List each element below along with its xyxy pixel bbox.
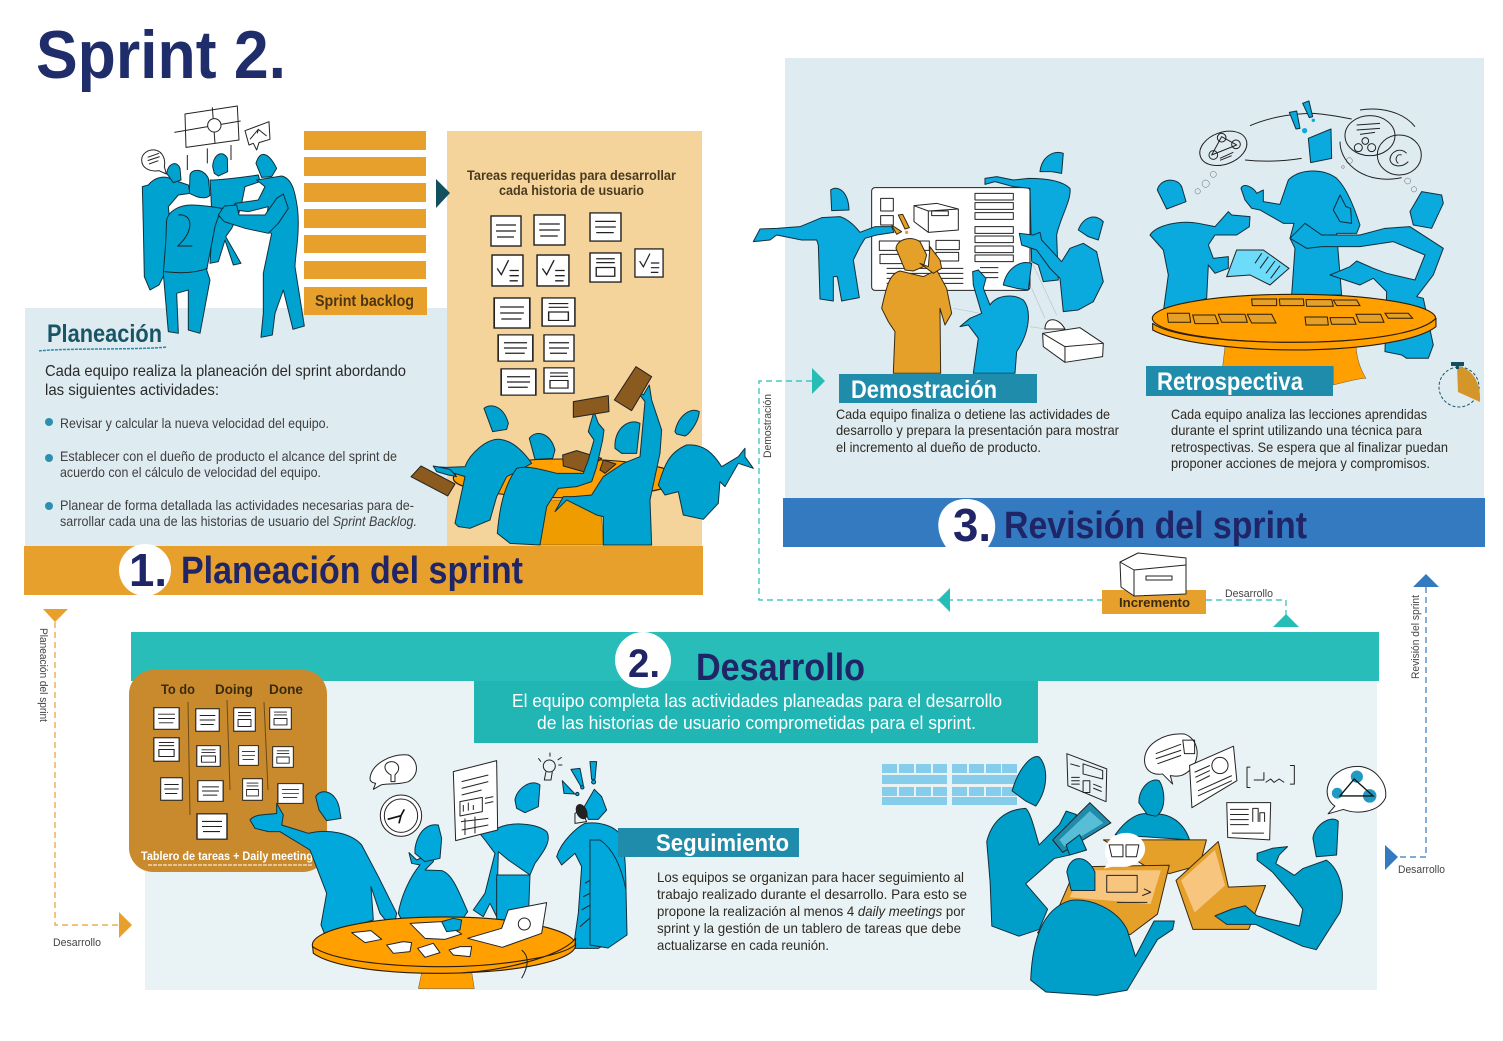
flow: demostración to incremento: Demostración (762, 394, 774, 458)
heading: seguimiento: Seguimiento (656, 830, 789, 857)
icon: stopwatch (1439, 362, 1480, 407)
number: 2: 2. (628, 642, 660, 686)
text block: retrospectiva (1171, 406, 1448, 471)
illustration: developers with laptops (987, 734, 1386, 995)
doc sketches (1067, 734, 1386, 840)
illustration: seguimiento team (250, 753, 626, 989)
text block: retrospectiva: retrospectivas. Se espera que al finalizar puedan (1171, 439, 1448, 455)
text block: seguimiento: trabajo realizado durante el desarrollo. Para esto se (657, 886, 967, 902)
panel: tablero de tareas: To do (161, 681, 195, 697)
incremento box (1102, 553, 1206, 614)
panel: tareas background (447, 131, 702, 546)
text block: seguimiento: actualizarse en cada reunión. (657, 937, 829, 953)
bullet list: planeación activities: Planear de forma detallada las actividades necesarias para de- (60, 497, 414, 513)
panel: desarrollo background (145, 681, 1377, 990)
callout: desarrollo description (474, 681, 1038, 743)
text block: seguimiento: sprint y la gestión de un tablero de tareas que debe (657, 920, 961, 936)
flow: desarrollo to revisión: Desarrollo (1398, 864, 1445, 876)
bullet list: planeación activities: Establecer con el dueño de producto el alcance del sprint de (60, 448, 397, 464)
text block: retrospectiva: proponer acciones de mejora y compromisos. (1171, 455, 1430, 471)
flow: demostración to incremento: Desarrollo (1225, 588, 1273, 600)
arrow: backlog to tasks (436, 179, 450, 208)
icon: blue kanban grid (882, 764, 1017, 805)
heading: retrospectiva: Retrospectiva (1157, 368, 1304, 396)
bullet list: planeación activities (45, 415, 417, 529)
panel: revisión background (785, 58, 1484, 498)
board (872, 188, 1030, 290)
flow: planeación to desarrollo: Planeación del sprint (37, 628, 49, 722)
band: 3. revisión del sprint (783, 498, 1485, 551)
heading: tareas requeridas: cada historia de usuario (499, 182, 644, 198)
text block: planeación intro: Cada equipo realiza la planeación del sprint abordando (45, 363, 406, 380)
callout: desarrollo description: de las historias de usuario comprometidas para el sprint. (537, 713, 976, 733)
text block: demostración: Cada equipo finaliza o detiene las actividades de (836, 406, 1110, 422)
band: 1. planeación del sprint: Planeación del sprint (181, 550, 523, 592)
bubble: two cards (1104, 833, 1145, 869)
panel: tablero de tareas: Tablero de tareas + Daily meeting (141, 849, 313, 863)
illustration: planning team standing (142, 106, 304, 337)
band: 2. desarrollo (131, 632, 1379, 689)
callout: desarrollo description: El equipo completa las actividades planeadas para el desarrollo (512, 691, 1002, 711)
text block: retrospectiva: durante el sprint utilizando una técnica para (1171, 422, 1422, 438)
icon: board sketch (174, 106, 241, 147)
bullet list: planeación activities: Revisar y calcular la nueva velocidad del equipo. (60, 415, 329, 431)
text block: demostración: desarrollo y prepara la presentación para mostrar (836, 422, 1119, 438)
illustration: retrospectiva (1150, 101, 1443, 385)
heading: tareas requeridas: Tareas requeridas para desarrollar (467, 167, 676, 183)
icon: clock (380, 795, 422, 836)
panel: tablero de tareas (129, 670, 327, 872)
flow: demostración to incremento (759, 368, 1299, 627)
text block: planeación intro: las siguientes actividades: (45, 382, 219, 399)
text block: demostración: el incremento al dueño de producto. (836, 439, 1041, 455)
flow: desarrollo to revisión (1385, 574, 1445, 876)
flow: planeación to desarrollo: Desarrollo (53, 937, 101, 949)
icon: speech bubble right (245, 122, 270, 150)
band: 1. planeación del sprint: 1. (129, 544, 167, 596)
icon: idea and alerts (538, 753, 597, 821)
panel: tablero de tareas: Doing (215, 681, 253, 697)
incremento box: Incremento (1119, 595, 1190, 610)
heading: demostración: Demostración (851, 376, 997, 404)
text block: seguimiento: Los equipos se organizan para hacer seguimiento al (657, 869, 964, 885)
band: 3. revisión del sprint: Revisión del sprint (1004, 505, 1307, 547)
title: Sprint 2. (36, 17, 286, 93)
band: 3. revisión del sprint: 3. (953, 499, 991, 551)
heading: planeación: Planeación (47, 320, 162, 348)
icon: idea bubble (370, 755, 416, 789)
task notes (491, 213, 663, 395)
sprint backlog stack: Sprint backlog (315, 293, 414, 310)
text block: retrospectiva: Cada equipo analiza las lecciones aprendidas (1171, 406, 1427, 422)
text block: seguimiento (657, 869, 967, 953)
flow: desarrollo to revisión: Revisión del sprint (1410, 595, 1422, 679)
illustration: demostración (753, 152, 1103, 373)
icon: chart paper (453, 761, 498, 841)
illustration: team around planning table (411, 367, 753, 545)
bullet list: planeación activities: sarrollar cada una de las historias de usuario del Sprint Backlog. (60, 513, 417, 529)
flow: planeación to desarrollo (37, 609, 132, 949)
table cards (1167, 299, 1413, 325)
icon: speech bubble left (142, 150, 166, 174)
band: 1. planeación del sprint (24, 544, 703, 596)
person overlap on heading (590, 840, 627, 948)
heading: tareas requeridas (467, 167, 676, 198)
text block: planeación intro (45, 363, 406, 399)
sprint backlog stack (304, 131, 427, 315)
band: 2. desarrollo: Desarrollo (696, 647, 865, 689)
text block: demostración (836, 406, 1119, 455)
bullet list: planeación activities: acuerdo con el cálculo de velocidad del equipo. (60, 464, 321, 480)
panel: planeación background (25, 308, 447, 546)
text block: seguimiento: propone la realización al menos 4 daily meetings por (657, 903, 965, 919)
panel: tablero de tareas: Done (269, 681, 303, 697)
number: 2 (615, 632, 671, 688)
